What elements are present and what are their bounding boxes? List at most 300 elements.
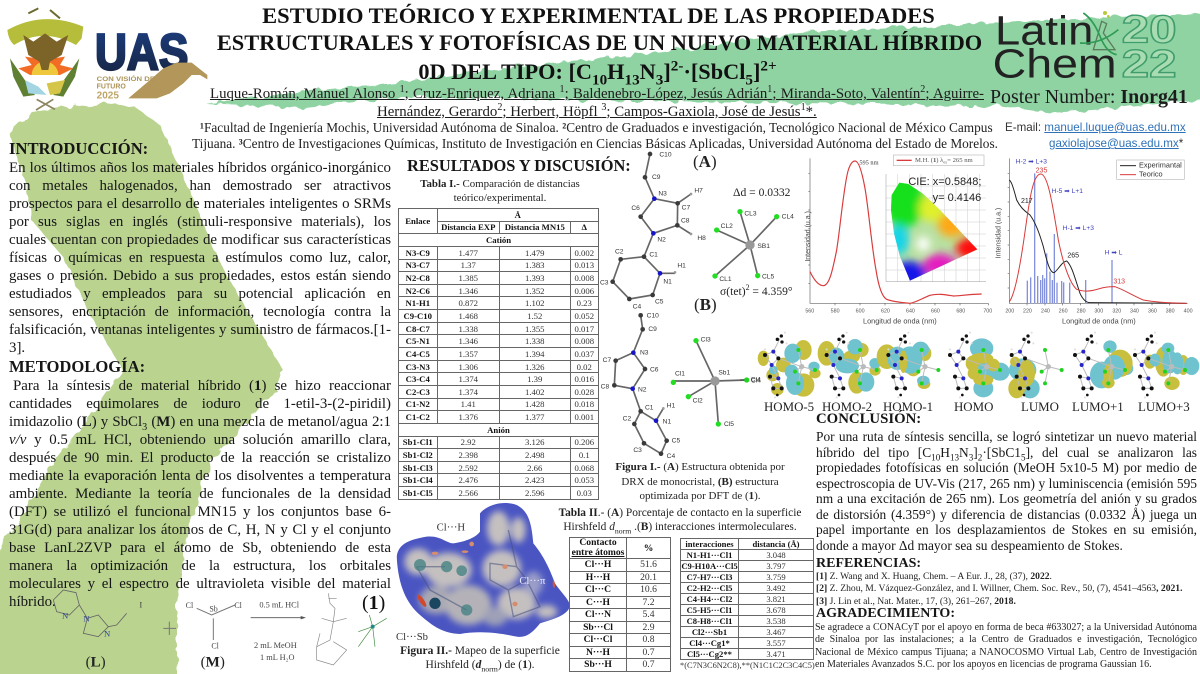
affiliations <box>192 120 998 151</box>
table I: distances: 0.037 <box>574 349 594 359</box>
table II A: contact percentages: 51.6 <box>640 559 657 570</box>
molecular structures A and B: H1 <box>667 402 675 409</box>
text: conclusión: nm a una excitación de 265 nm). Los geometría del anión y su grados <box>816 491 1197 506</box>
table I: distances: Sb1-Cl1 <box>403 437 433 447</box>
text: metodología: mediante la evaporación lenta de los disolventes a temperatura <box>9 468 391 484</box>
table I: distances: 1.338 <box>458 324 478 334</box>
table I: distances: C1-N2 <box>406 399 430 409</box>
text: metodología: moleculares y el espectro de ultravioleta visible del material <box>9 576 391 592</box>
table I: distances: 1.352 <box>525 286 545 296</box>
molecular structures A and B: N3 <box>658 191 667 198</box>
table I: distances: Sb1-Cl2 <box>403 450 433 460</box>
text: metodología: después de 90 min. El producto de la reacción se cristalizo <box>9 450 391 466</box>
chart: UV-Vis spectrum: 280 <box>1077 308 1086 314</box>
molecular structures A and B: Cl2 <box>693 398 703 405</box>
CIE chromaticity diagram: CIE: x=0.5848; <box>908 176 981 188</box>
table I: distances: 2.92 <box>461 437 476 447</box>
molecular structures A and B: N3 <box>640 349 649 356</box>
text: agradecimiento: de Sinaloa por las instalaciones; a la Centro de Graduados e investigación, Tecnológico <box>815 634 1197 645</box>
text: metodología: Para la síntesis de material híbrido (1) se hizo reaccionar <box>13 378 391 394</box>
chart: UV-Vis spectrum: 360 <box>1148 308 1157 314</box>
reaction scheme: (M) <box>201 655 225 671</box>
molecular structures A and B: C4 <box>633 304 641 311</box>
logo: UAS <box>95 23 208 101</box>
text: metodología: imidazolio (L) y SbCl3 (M) en una mezcla de metanol/agua 2:1 <box>9 414 391 433</box>
text: introducción: con metales halogenados, han demostrado ser atractivos <box>9 178 391 194</box>
orbital labels: LUMO <box>1021 400 1059 414</box>
title: ESTUDIO TEÓRICO Y EXPERIMENTAL DE LAS PROPIEDADES <box>262 3 935 28</box>
molecular structures A and B: Cl1 <box>675 370 685 377</box>
chart: UV-Vis spectrum: 300 <box>1094 308 1103 314</box>
table II B: intermolecular interactions: C8-H8···Cl1 <box>687 616 732 626</box>
chart: emission spectrum: 640 <box>906 308 915 314</box>
text: metodología: manera la optimización de la estructura, los orbitales <box>9 558 391 574</box>
chart: emission spectrum: 600 <box>856 308 865 314</box>
orbital labels: HOMO-5 <box>764 400 814 414</box>
table I: distances: 3.126 <box>525 437 545 447</box>
chart: emission spectrum: 620 <box>881 308 890 314</box>
text: conclusión: papel importante en los desplazamientos de Stokes en su emisión, <box>816 522 1197 537</box>
reaction scheme: Cl <box>234 601 243 610</box>
chart: emission spectrum: M.H. (1) λ <box>915 157 943 164</box>
chart: UV-Vis spectrum: Longitud de onda (nm) <box>1062 316 1136 325</box>
chart: emission spectrum: = 265 nm <box>947 157 974 164</box>
chart: UV-Vis spectrum: Experimantal <box>1139 161 1182 170</box>
text: metodología: base LanL2ZVP para el átomo de Sb, obteniendo de esta <box>9 540 391 556</box>
heading: agradecimiento: AGRADECIMIENTO: <box>816 606 955 621</box>
table I: distances: 0.23 <box>577 298 592 308</box>
figure I caption <box>615 461 785 502</box>
table I: distances: 2.498 <box>525 450 545 460</box>
table I: distances: Enlace <box>405 216 430 226</box>
table I: distances: 0.068 <box>574 463 594 473</box>
table II B: intermolecular interactions: Cl5···Cg2** <box>687 649 732 659</box>
table I: distances: C9-C10 <box>404 311 432 321</box>
table I: distances: 2.476 <box>458 475 478 485</box>
authors: Luque-Román, Manuel Alonso 1; Cruz-Enriquez, Adriana 1; Baldenebro-López, Jesús Adrián1; Miranda-Soto, Valentín2; Aguirre- <box>210 84 984 102</box>
text: introducción <box>9 160 391 356</box>
table I: distances: C3-N3 <box>406 362 430 372</box>
reaction scheme: 1 mL H₂O <box>260 653 295 662</box>
table I: distances: N3-C7 <box>406 260 430 270</box>
molecular structures A and B: C8 <box>681 218 690 225</box>
Hirshfeld surface <box>396 503 569 643</box>
logo: UAS: UAS <box>95 23 188 80</box>
title: ESTRUCTURALES Y FOTOFÍSICAS DE UN NUEVO MATERIAL HÍBRIDO <box>217 30 982 55</box>
table I: distances: Anión <box>487 425 510 435</box>
table II A: contact percentages: Cl···N <box>585 609 611 620</box>
table I: distances: Sb1-Cl5 <box>403 488 433 498</box>
table I caption: teórico/experimental. <box>454 192 546 204</box>
table I: distances: 0.02 <box>577 362 592 372</box>
chart: UV-Vis spectrum: 260 <box>1059 308 1068 314</box>
table II A: contact percentages: Sb···Cl <box>583 622 613 633</box>
table I: distances: N2-C6 <box>406 286 430 296</box>
CIE chromaticity diagram <box>886 174 986 282</box>
table II B: intermolecular interactions: 3.492 <box>766 583 786 593</box>
molecular structures A and B: C9 <box>648 326 657 333</box>
table I: distances: N2-C8 <box>406 273 430 283</box>
table II B: intermolecular interactions: 3.538 <box>766 616 786 626</box>
table II B: intermolecular interactions: C9-H10A···Cl5 <box>681 561 738 571</box>
table II A: contact percentages: Cl···C <box>585 584 611 595</box>
affiliations: ¹Facultad de Ingeniería Mochis, Universidad Autónoma de Sinaloa. ²Centro de Graduados e investigación, Tecnológico Nacional de México Campus <box>200 120 993 135</box>
table II A: contact percentages: entre átomos <box>572 547 624 558</box>
molecular structures A and B: C2 <box>615 248 624 255</box>
table I: distances: 1.41 <box>461 399 476 409</box>
table I: distances: 2.66 <box>527 463 542 473</box>
table II A: contact percentages <box>569 537 671 672</box>
text: introducción: físicas o químicas en respuesta a estímulos como luz, calor, <box>9 250 391 266</box>
table I: distances: C8-C7 <box>406 324 430 334</box>
chart: UV-Vis spectrum: 220 <box>1023 308 1032 314</box>
text: introducción: falsificación, ventanas inteligentes y suministro de fármacos.[1- <box>9 322 391 338</box>
table II A: contact percentages: 2.9 <box>642 622 654 633</box>
chart: UV-Vis spectrum: 340 <box>1130 308 1139 314</box>
table II B: intermolecular interactions: Cl2···Sb1 <box>692 627 727 637</box>
references list: [2] Z. Zhou, M. Vázquez-González, and I. Willner, Chem. Soc. Rev., 50, (7), 4541–4563, 2021. <box>816 583 1182 594</box>
table I: distances: 1.394 <box>525 349 545 359</box>
reaction scheme: 2 mL MeOH <box>254 641 297 650</box>
delta d label: Δd = 0.0332 <box>733 186 790 199</box>
chart: emission spectrum: Intensidad (u.a.) <box>805 211 812 262</box>
table I: distances: Å <box>515 210 521 220</box>
reaction scheme: Cl <box>186 601 194 610</box>
table I: distances: Sb1-Cl3 <box>403 463 433 473</box>
heading: resultados y discusión: RESULTADOS Y DISCUSIÓN: <box>407 156 631 175</box>
figure II caption: Figura II.- Mapeo de la superficie <box>400 645 560 657</box>
Hirshfeld surface: Cl···π <box>519 576 546 587</box>
Hirshfeld surface: Cl···Sb <box>396 632 428 643</box>
contact emails: gaxiolajose@uas.edu.mx* <box>1049 137 1183 150</box>
text: introducción: por sus siglas en inglés (stimuli-responsive materials), los <box>9 214 391 230</box>
table II B: intermolecular interactions: 3.557 <box>766 638 786 648</box>
figure II caption: Hirshfeld (dnorm) de (1). <box>425 659 535 673</box>
table I: distances: 0.008 <box>574 336 594 346</box>
table I: distances: Distancia EXP <box>441 222 495 232</box>
orbital labels <box>764 400 1190 414</box>
table II B: intermolecular interactions: 3.471 <box>766 649 786 659</box>
text: metodología: ambiente. Mediante la teoría de funcionales de la densidad <box>9 486 391 502</box>
table II B: intermolecular interactions: interacciones <box>685 539 734 549</box>
reaction scheme: 0.5 mL HCl <box>259 600 300 609</box>
table II caption: Hirshfeld dnorm .(B) interacciones intermoleculares. <box>563 521 797 535</box>
logo: LatinChem 2022: Chem <box>993 40 1117 86</box>
chart: UV-Vis spectrum <box>995 158 1193 325</box>
text: metodología: cantidades equimolares de ioduro de 1-etil-3-(2-piridil) <box>9 396 391 412</box>
table I: distances: 1.374 <box>458 374 478 384</box>
chart: UV-Vis spectrum: H-5 ➡ L+1 <box>1052 188 1083 195</box>
poster number: Poster Number: Inorg41 <box>990 86 1188 108</box>
molecular orbitals: Cl4 <box>751 377 761 384</box>
reaction scheme: Cl <box>211 641 220 650</box>
text: conclusión <box>816 429 1197 553</box>
table I: distances: 0.053 <box>574 475 594 485</box>
table II B: intermolecular interactions: 3.821 <box>766 594 786 604</box>
molecular structures A and B: C8 <box>601 384 609 391</box>
figure I caption: Figura I.- (A) Estructura obtenida por <box>615 461 785 473</box>
table II B: intermolecular interactions: 3.048 <box>766 550 786 560</box>
molecular structures A and B: CL3 <box>744 210 757 217</box>
table I: distances: 0.1 <box>579 450 590 460</box>
table II B: intermolecular interactions: C4-H4···Cl2 <box>687 594 732 604</box>
table I: distances: Catión <box>486 235 511 245</box>
heading: metodología: METODOLOGÍA: <box>9 357 145 376</box>
table II B: intermolecular interactions: N1-H1···Cl1 <box>687 550 732 560</box>
text: conclusión: Por una ruta de síntesis sencilla, se logró sintetizar un nuevo material <box>816 429 1197 444</box>
table II A: contact percentages: Sb···H <box>584 659 612 670</box>
table I: distances: 2.596 <box>525 488 545 498</box>
table II A: contact percentages: C···H <box>586 597 610 608</box>
molecular structures A and B: H8 <box>697 235 706 242</box>
chart: UV-Vis spectrum: 217 <box>1021 198 1033 205</box>
orbital labels: HOMO <box>954 400 993 414</box>
chart: emission spectrum <box>804 154 992 325</box>
CIE chromaticity diagram: y= 0.4146 <box>933 192 981 204</box>
orbital labels: HOMO-1 <box>883 400 933 414</box>
molecular structures A and B: Sb1 <box>718 369 730 376</box>
text: agradecimiento: en Materiales Avanzados S.C. por los apoyos en licencias de programa Gaussian 16. <box>815 659 1152 670</box>
table II A: contact percentages: Cl···H <box>585 559 611 570</box>
molecular structures A and B: N2 <box>638 386 647 393</box>
molecular structures A and B: C3 <box>633 447 642 454</box>
molecular structures A and B: C5 <box>672 437 680 444</box>
table I: distances: 0.872 <box>458 298 478 308</box>
table I: distances: 1.37 <box>461 260 476 270</box>
table II A: contact percentages: H···H <box>586 572 610 583</box>
text: conclusión: propiedades fotofísicas en solución (MeOH 5x10-5 M) por medio de <box>816 460 1197 475</box>
table I: distances: 0.001 <box>574 412 594 422</box>
table I: distances: N3-C9 <box>406 248 430 258</box>
table I: distances: 0.206 <box>574 437 594 447</box>
text: agradecimiento: Se agradece a CONACyT por el apoyo en forma de beca #633027; a la Universidad Autónoma <box>815 622 1197 633</box>
molecular structures A and B: C7 <box>682 204 690 211</box>
table II B: intermolecular interactions: distancia (Å) <box>752 539 800 549</box>
text: metodología: v/v y 0.5 mL HCl, obteniendo una solución amarillo clara, <box>9 432 391 448</box>
table I: distances: 2.566 <box>458 488 478 498</box>
table I: distances: 1.393 <box>525 273 545 283</box>
figure II caption <box>400 645 560 673</box>
text: conclusión: de distorsión (4.359°) y diferencia de distancias (0.0332 Å) juega un <box>816 507 1197 522</box>
molecular structures A and B: C3 <box>600 280 609 287</box>
table I: distances: C3-C4 <box>406 374 430 384</box>
figure I caption: optimizada por DFT de (1). <box>639 490 761 502</box>
table II B: intermolecular interactions <box>680 538 814 660</box>
text: introducción: cuales cuentan con propiedades de modificar sus características <box>9 232 391 248</box>
table II B: intermolecular interactions: 3.797 <box>766 561 786 571</box>
chart: emission spectrum: 680 <box>956 308 965 314</box>
table II B: intermolecular interactions: C5-H5···Cl1 <box>687 605 732 615</box>
text: metodología: 31G(d) para analizar los átomos de C, H, N y Cl y el conjunto <box>9 522 391 538</box>
chart: UV-Vis spectrum: Intensidad (u.a.) <box>995 208 1002 258</box>
text: conclusión: donde a mayor Δd mayor sea su despeamiento de Stokes. <box>816 538 1123 553</box>
chart: emission spectrum: 560 <box>805 308 814 314</box>
chart: UV-Vis spectrum: 313 <box>1113 279 1125 286</box>
chart: emission spectrum: 700 <box>983 308 992 314</box>
table I: distances: 1.357 <box>458 349 478 359</box>
table I: distances: C5-N1 <box>406 336 430 346</box>
reaction scheme: N <box>83 614 90 624</box>
affiliations: Tijuana. ³Centro de Investigaciones Químicas, Instituto de Investigación en Ciencias Básicas Aplicadas, Universidad Autónoma del Estado de Morelos. <box>192 136 998 151</box>
table I: distances: 1.402 <box>525 387 545 397</box>
logo: LatinChem 2022: 22 <box>1122 42 1177 86</box>
molecular orbitals <box>740 332 1200 398</box>
text: introducción: En los últimos años los materiales híbridos orgánico-inorgánico <box>9 160 391 176</box>
molecular structures A and B: Cl5 <box>724 421 734 428</box>
table II A: contact percentages: % <box>644 542 653 554</box>
chart: UV-Vis spectrum: 265 <box>1067 253 1079 260</box>
text: conclusión: espectroscopia de UV-Vis (217, 265 nm) y luminiscencia (emisión 595 <box>816 476 1197 491</box>
table I: distances: Δ <box>582 222 587 232</box>
reaction scheme <box>52 590 387 671</box>
table II caption: Tabla II.- (A) Porcentaje de contacto en la superficie <box>559 507 801 519</box>
table II A: contact percentages: 10.6 <box>640 584 657 595</box>
table II A: contact percentages: 0.8 <box>642 634 654 645</box>
table I: distances: 1.479 <box>525 248 545 258</box>
table II B: intermolecular interactions: C2-H2···Cl5 <box>687 583 732 593</box>
text: introducción: 3]. <box>9 340 25 356</box>
molecular structures A and B: C4 <box>667 453 675 460</box>
logo: LatinChem 2022: Latin <box>995 8 1093 54</box>
molecular structures A and B: CL1 <box>719 276 732 283</box>
table I: distances: 0.018 <box>574 399 594 409</box>
table I: distances: C4-C5 <box>406 349 430 359</box>
table II A: contact percentages: Cl···Cl <box>584 634 612 645</box>
reaction scheme: (L) <box>86 655 106 671</box>
table I: distances: 1.39 <box>527 374 542 384</box>
table I: distances: 1.383 <box>525 260 545 270</box>
orbital labels: HOMO-2 <box>822 400 872 414</box>
orbital labels: LUMO+1 <box>1072 400 1124 414</box>
table I: distances: 1.102 <box>525 298 545 308</box>
table I: distances: 1.468 <box>458 311 478 321</box>
chart: UV-Vis spectrum: 320 <box>1112 308 1121 314</box>
chart: UV-Vis spectrum: 235 <box>1036 167 1047 174</box>
table II B: intermolecular interactions: 3.678 <box>766 605 786 615</box>
table I: distances: 2.398 <box>458 450 478 460</box>
molecular structures A and B: C6 <box>631 205 640 212</box>
molecular structures A and B: CL2 <box>721 223 733 230</box>
molecular structures A and B: SB1 <box>757 243 770 250</box>
chart: emission spectrum: 580 <box>831 308 840 314</box>
table I: distances: Sb1-Cl4 <box>403 475 433 485</box>
molecular structures A and B: H7 <box>694 187 703 194</box>
table I: distances: 2.592 <box>458 463 478 473</box>
table I: distances: 2.423 <box>525 475 545 485</box>
logo: university emblem <box>7 8 84 111</box>
text: introducción: sensores, encriptación de información, tecnología contra la <box>9 304 391 320</box>
logo: UAS: FUTURO <box>97 84 126 91</box>
table I: distances: 1.428 <box>525 399 545 409</box>
heading: conclusión: CONCLUSIÓN: <box>816 411 921 427</box>
sigma label: σ(tet)2 = 4.359° <box>720 283 793 298</box>
text: agradecimiento <box>815 622 1197 670</box>
molecular structures A and B <box>600 152 794 460</box>
compound label (1): (1) <box>362 592 385 614</box>
chart: emission spectrum: 595 nm <box>859 159 879 166</box>
table II A: contact percentages: 5.4 <box>642 609 654 620</box>
table II B: intermolecular interactions: 3.759 <box>766 572 786 582</box>
molecular structures A and B: C10 <box>647 312 659 319</box>
text: introducción: prospectos para el desarrollo de materiales inteligentes o SRMs <box>9 196 391 212</box>
table I: distances: 0.028 <box>574 387 594 397</box>
figure I caption: DRX de monocristal, (B) estructura <box>621 476 779 488</box>
molecular structures A and B: C1 <box>649 252 658 259</box>
table I: distances: 0.006 <box>574 286 594 296</box>
table II caption <box>558 507 802 535</box>
table II B: intermolecular interactions: C7-H7···Cl3 <box>687 572 732 582</box>
table II footnote: *(C7N3C6N2C8),**(N1C1C2C3C4C5) <box>680 661 815 670</box>
reaction scheme: N <box>104 629 111 639</box>
table I caption <box>420 178 580 204</box>
orbital labels: LUMO+3 <box>1138 400 1190 414</box>
chart: UV-Vis spectrum: H-1 ➡ L+3 <box>1063 225 1094 232</box>
molecular structures A and B: N2 <box>657 237 666 244</box>
table I: distances: 1.306 <box>458 362 478 372</box>
table I: distances: 1.355 <box>525 324 545 334</box>
table I: distances: C1-C2 <box>406 412 430 422</box>
authors: Hernández, Gerardo2; Herbert, Höpfl 3; Campos-Gaxiola, José de Jesús1*. <box>377 102 817 120</box>
molecular structures A and B: C1 <box>645 404 654 411</box>
label (B): (B) <box>694 295 717 314</box>
table II B: intermolecular interactions: Cl4···Cg1* <box>689 638 730 648</box>
text: conclusión: híbrido del tipo [C10H13N3]2·[SbC15], del cual se analizaron las <box>816 445 1197 462</box>
contact emails <box>1005 121 1186 150</box>
table I: distances: 0.002 <box>574 248 594 258</box>
table I: distances: 0.016 <box>574 374 594 384</box>
table I: distances: 1.385 <box>458 273 478 283</box>
molecular structures A and B: N1 <box>663 418 671 425</box>
table I: distances: 1.346 <box>458 286 478 296</box>
table I: distances: 1.377 <box>525 412 545 422</box>
table I: distances: Distancia MN15 <box>505 222 565 232</box>
molecular structures A and B: C10 <box>659 152 672 159</box>
chart: emission spectrum: 660 <box>931 308 940 314</box>
reaction scheme: Sb <box>209 604 218 613</box>
table I: distances: 0.013 <box>574 260 594 270</box>
table I: distances: 1.326 <box>525 362 545 372</box>
molecular structures A and B: H1 <box>677 263 686 270</box>
Hirshfeld surface: Cl···H <box>437 523 465 534</box>
heading: introducción: INTRODUCCIÓN: <box>9 139 148 158</box>
chart: UV-Vis spectrum: Teorico <box>1139 170 1163 179</box>
table II B: intermolecular interactions: 3.467 <box>766 627 786 637</box>
text: introducción: estudiados y empleados para su potencial aplicación en <box>9 286 391 302</box>
chart: emission spectrum: Longitud de onda (nm) <box>863 316 937 325</box>
table II A: contact percentages: 7.2 <box>642 597 654 608</box>
table I: distances: 1.52 <box>527 311 542 321</box>
references list <box>816 571 1182 607</box>
text: introducción: gases o presión. Debido a sus propiedades, estos están siendo <box>9 268 391 284</box>
logo: UAS: CON VISIÓN DE <box>97 74 156 83</box>
text: metodología: híbrido. <box>9 594 56 610</box>
table I: distances: 0.03 <box>577 488 592 498</box>
chart: UV-Vis spectrum: 200 <box>1005 308 1014 314</box>
table I: distances: 1.338 <box>525 336 545 346</box>
table I: distances: 1.376 <box>458 412 478 422</box>
table II A: contact percentages: N···H <box>586 647 610 658</box>
table I: distances <box>398 208 599 500</box>
table I: distances: 1.346 <box>458 336 478 346</box>
table II A: contact percentages: 0.7 <box>642 647 654 658</box>
logo: LatinChem 2022 <box>993 7 1177 86</box>
table I caption: Tabla I.- Comparación de distancias <box>420 178 580 190</box>
authors <box>210 84 984 120</box>
table I: distances: 1.477 <box>458 248 478 258</box>
logo: LatinChem 2022: 20 <box>1122 7 1177 51</box>
chart: UV-Vis spectrum: 240 <box>1041 308 1050 314</box>
contact emails: E-mail: manuel.luque@uas.edu.mx <box>1005 121 1186 134</box>
